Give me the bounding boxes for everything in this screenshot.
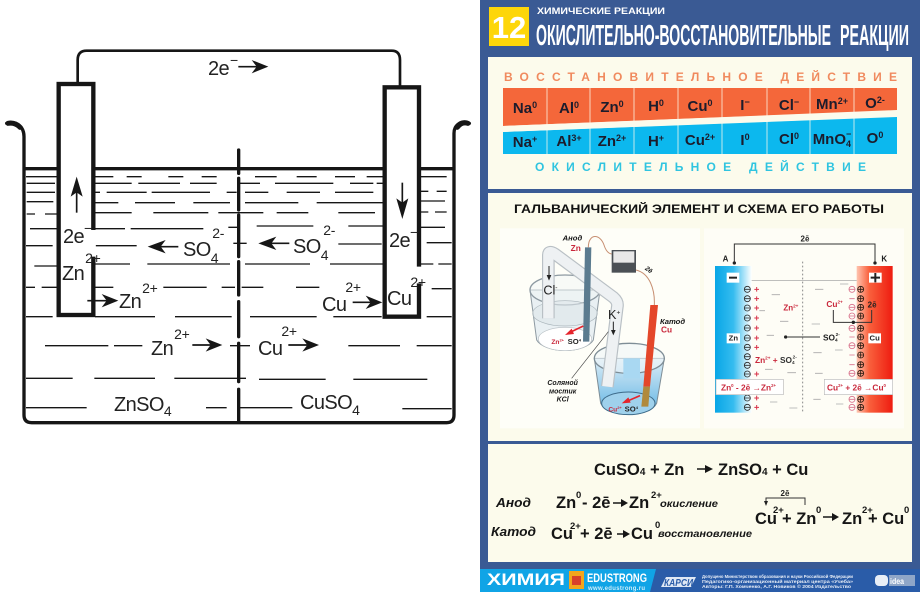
electron transfer equation: 2+ (862, 505, 873, 516)
sulfate migration arrow (787, 335, 820, 338)
oxidizing agents row: − (846, 129, 851, 139)
sulfate right beaker: 4 (636, 405, 639, 410)
copper sulfate label: CuSO (300, 392, 352, 414)
anode equation: 0 (576, 490, 581, 501)
reducing agents row: 0 (532, 100, 537, 110)
reducing agents row: I (740, 97, 744, 114)
heading: oxidizing action: ОКИСЛИТЕЛЬНОЕ ДЕЙСТВИЕ (535, 159, 866, 174)
imprint text: Педагогико-организационный материал центра «Учеба» (702, 579, 854, 584)
sulfate label: 2- (836, 332, 840, 337)
reducing agents row: 2- (877, 95, 885, 105)
cathode half reaction: + 2ē →Cu (843, 383, 884, 393)
potassium ion: + (616, 309, 620, 316)
ions in left beaker: Zn (551, 339, 559, 346)
blue row shape (503, 117, 897, 154)
poster background (480, 0, 920, 592)
schematic: electrode charge diagram (704, 228, 904, 428)
copper box: Cu (870, 334, 880, 343)
zinc ion leaving electrode: Zn (119, 291, 141, 313)
cathode letter: K (881, 255, 887, 264)
right beaker (594, 343, 664, 415)
right sulfate ion: 4 (321, 247, 329, 263)
cathode equation: Cu (551, 525, 573, 543)
oxidizing agents row: Zn (598, 133, 616, 150)
anode equation (556, 490, 718, 512)
cathode half reaction: 0 (884, 383, 887, 388)
anode equation: - 2ē (582, 494, 610, 512)
oxidizing agents row: 0 (878, 130, 883, 140)
right sulfate ion: SO (293, 236, 321, 258)
ions near anode: 2+ (765, 356, 771, 361)
copper ion label: Cu (826, 299, 837, 309)
anode letter: A (723, 255, 729, 264)
ions in right beaker: 2+ (617, 405, 622, 410)
reducing agents row: H (648, 98, 659, 115)
anode label: Анод (495, 495, 531, 510)
footer band (480, 569, 920, 592)
anode charges (744, 286, 759, 410)
cell line art: vessel, electrodes, wire, liquid lines (7, 51, 469, 423)
ion arrows (547, 266, 616, 335)
oxidizing agents row (513, 129, 883, 151)
reducing agents row: − (744, 97, 750, 107)
left sulfate ion: SO (183, 239, 211, 261)
ions near anode: 4 (792, 360, 795, 365)
oxidizing agents row: 3+ (571, 133, 582, 143)
zinc electrode label 2e: 2e (63, 226, 84, 248)
wire label: 2e: 2e (208, 58, 229, 80)
electron label on wire: 2ē (643, 265, 654, 276)
anode equation: 2+ (651, 490, 662, 501)
zinc sulfate label: 4 (164, 403, 172, 419)
salt bridge tube (548, 252, 617, 387)
oxidizing agents row: I (740, 132, 745, 149)
oxidizing agents row: 0 (794, 131, 799, 141)
cathode bar (857, 266, 893, 413)
left beaker (530, 275, 600, 351)
ions in left beaker: 2+ (559, 337, 565, 342)
zinc electrode ion: 2+ (85, 250, 101, 266)
ions near anode: Zn (755, 355, 765, 365)
electron transfer equation: Cu (755, 510, 777, 528)
oxidizing agents row: Cu (685, 132, 705, 149)
electron transfer equation: + Zn (782, 510, 816, 528)
anode half reaction: 2+ (771, 383, 777, 388)
cathode equation (551, 520, 752, 543)
anode half reaction: 0 (731, 383, 734, 388)
reducing agents row: Zn (600, 99, 619, 116)
electron transfer bracket (833, 310, 872, 322)
zinc electrode (583, 247, 591, 342)
cathode equation: 2+ (570, 521, 581, 532)
cathode half reaction: Cu (827, 383, 838, 393)
ions near anode: SO (780, 355, 793, 365)
anode zinc label: Zn (571, 243, 581, 253)
anode bar (715, 266, 752, 413)
zinc ion label: Zn (783, 304, 793, 313)
cathode equation: восстановление (658, 529, 752, 540)
cathode equation: + 2ē (580, 525, 613, 543)
reducing agents row: − (794, 97, 799, 107)
publisher name: EDUSTRONG (587, 571, 647, 585)
electron transfer equation (755, 489, 909, 528)
anode equation: Zn (629, 494, 649, 512)
panel heading: ГАЛЬВАНИЧЕСКИЙ ЭЛЕМЕНТ И СХЕМА ЕГО РАБОТЫ (514, 203, 884, 216)
imprint text: Авторы: Г.П. Хомченко, А.Г. Новиков © 2004 Издательство (702, 584, 852, 589)
copper electrode ion: 2+ (410, 274, 426, 290)
sulfate left beaker: SO (568, 337, 579, 346)
oxidizing agents row: 0 (745, 132, 750, 142)
zinc electrode ion: Zn (62, 263, 84, 285)
oxidizing agents row: + (659, 133, 664, 143)
anode equation: Zn (556, 494, 576, 512)
copper ion in solution: 2+ (281, 323, 297, 339)
oxidizing agents row: Na (513, 134, 532, 151)
reducing agents row: 0 (707, 98, 713, 108)
copper electrode label 2e: 2e (389, 230, 410, 252)
oxidizing agents row: MnO (813, 131, 846, 148)
oxidizing agents row: 2+ (705, 132, 715, 142)
subject name: ХИМИЯ (487, 570, 565, 589)
left sulfate ion: 2- (212, 225, 225, 241)
second logo: КАРСИ (664, 578, 694, 589)
sulfate right beaker: SO (625, 405, 636, 414)
cathode charges (849, 286, 864, 410)
cathode half reaction (824, 379, 893, 395)
zinc ion label: 2+ (793, 303, 799, 308)
copper electrode label 2e: − (410, 224, 418, 240)
zinc electrode label 2e: − (84, 220, 92, 236)
red ion arrows (565, 326, 640, 403)
sulfate label: SO (823, 332, 835, 342)
external circuit (734, 244, 875, 264)
ions near anode: 2- (793, 355, 797, 360)
copper electrode ion: Cu (387, 288, 411, 310)
oxidizing agents row: 2+ (616, 133, 626, 143)
oxidizing agents row: 4 (846, 139, 851, 149)
imprint text: Допущено Министерством образования и науки Российской Федерации (702, 574, 853, 579)
panel: reduction and oxidation table (488, 57, 912, 189)
overall reaction (594, 461, 808, 479)
oxidizing agents row: Cl (779, 131, 794, 148)
potassium ion: K (608, 308, 616, 322)
copper electrode (643, 305, 658, 387)
galvanometer (612, 250, 636, 273)
anode half reaction: Zn (721, 383, 731, 393)
reducing agents row (513, 95, 885, 117)
wire label: 2e: − (230, 52, 238, 68)
left sulfate ion: 4 (211, 250, 219, 266)
electron transfer equation: 0 (816, 505, 821, 516)
copper ion approaching electrode: Cu (322, 294, 346, 316)
reducing agents row: Mn (816, 96, 838, 113)
copper ion label: 2+ (837, 300, 843, 305)
reducing agents row: O (865, 95, 877, 112)
copper ion approaching electrode: 2+ (345, 279, 361, 295)
illustration: two beakers with salt bridge (500, 228, 700, 428)
publisher emblem (569, 571, 584, 589)
oxidizing agents row: Al (556, 133, 571, 150)
reducing agents row: 2+ (838, 96, 848, 106)
oxidizing agents row: + (532, 134, 537, 144)
anode half reaction: - 2ē →Zn (734, 383, 771, 393)
anode equation: окисление (660, 499, 718, 510)
chloride ion: - (555, 285, 558, 292)
right logo: idea (890, 577, 904, 586)
copper sulfate label: 4 (352, 402, 360, 418)
reducing agents row: Na (513, 100, 532, 117)
oxidizing agents row: H (648, 133, 659, 150)
cathode half reaction: 2+ (838, 383, 844, 388)
electron transfer equation: 2ē (781, 489, 790, 498)
negative terminal (727, 273, 739, 283)
overall reaction: CuSO4 + Zn (594, 461, 684, 479)
salt bridge leader line (572, 332, 608, 378)
salt bridge label: мостик (549, 388, 577, 395)
reducing agents row: Al (559, 100, 574, 117)
panel: electrochemical cell diagram (7, 51, 469, 423)
zinc box (727, 333, 740, 343)
sulfate label: 4 (835, 337, 838, 342)
oxidizing agents row: O (867, 130, 878, 147)
copper ion in solution: Cu (258, 338, 282, 360)
anode label: Анод (562, 234, 582, 243)
salt bridge label: KCl (557, 396, 570, 403)
circuit electron label: 2ē (801, 234, 810, 243)
electron transfer label: 2ē (868, 300, 877, 309)
cathode label: Катод (491, 524, 536, 539)
panel: equations (488, 444, 912, 562)
cathode copper label: Cu (661, 324, 672, 334)
right sulfate ion: 2- (323, 222, 336, 238)
chloride ion: Cl (543, 283, 555, 297)
reducing agents row: Cl (779, 97, 794, 114)
zinc ion in solution: Zn (151, 338, 173, 360)
overall reaction: ZnSO4 + Cu (718, 461, 808, 479)
anode half reaction (716, 379, 783, 395)
positive terminal (869, 273, 882, 283)
zinc sulfate label: ZnSO (114, 394, 164, 416)
panel: galvanic cell (488, 193, 912, 441)
orange row shape (503, 88, 897, 126)
reducing agents row: 0 (619, 99, 624, 109)
cathode equation: 0 (655, 520, 660, 531)
electron transfer equation: 2+ (773, 505, 784, 516)
electron transfer equation: Zn (842, 510, 862, 528)
salt bridge label: Соляной (547, 379, 579, 387)
right logo (875, 575, 915, 586)
ions near anode: + (770, 355, 780, 365)
publisher website: www.edustrong.ru (587, 586, 645, 592)
connecting wires (588, 237, 654, 305)
zinc ion in solution: 2+ (174, 326, 190, 342)
series label: ХИМИЧЕСКИЕ РЕАКЦИИ (537, 6, 665, 16)
cathode label: Катод (660, 317, 685, 326)
reducing agents row: 0 (659, 98, 664, 108)
number badge: 12 (492, 10, 526, 45)
heading: reducing action: ВОССТАНОВИТЕЛЬНОЕ ДЕЙСТВИЕ (504, 69, 897, 84)
copper electrode submerged (641, 387, 650, 407)
zinc box: Zn (729, 334, 738, 343)
poster header (489, 6, 909, 52)
electron transfer equation: 0 (904, 505, 909, 516)
zinc ion leaving electrode: 2+ (142, 280, 158, 296)
reducing agents row: 0 (574, 100, 579, 110)
electron transfer equation: + Cu (868, 510, 904, 528)
sulfate left beaker: 4 (579, 337, 582, 342)
reducing agents row: Cu (687, 98, 707, 115)
ions in right beaker: Cu (608, 407, 617, 414)
cathode equation: Cu (631, 525, 653, 543)
